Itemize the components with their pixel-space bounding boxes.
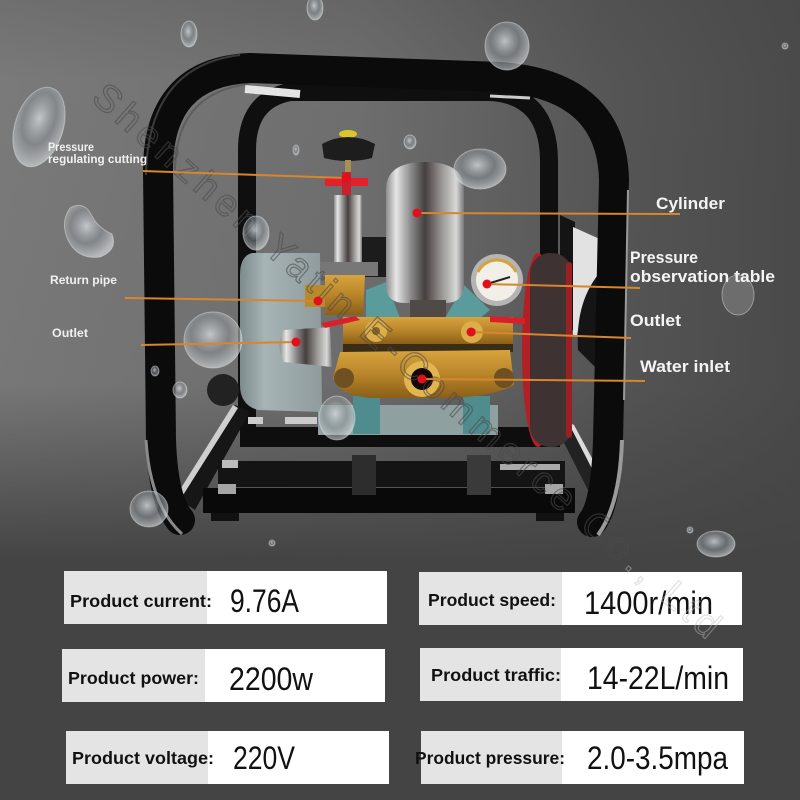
spec: product current: Product current: [70, 591, 212, 611]
callout lines and dots [125, 171, 680, 384]
water droplets [4, 0, 788, 557]
tank [386, 162, 464, 318]
label: pressure observation table [630, 249, 775, 286]
chrome outlet [280, 327, 332, 367]
spec: product power [62, 649, 385, 702]
spec: product traffic: Product traffic: [431, 665, 561, 685]
base frame [176, 405, 612, 521]
spec: product voltage: Product voltage: [72, 748, 214, 768]
label: return pipe: Return pipe [50, 275, 117, 287]
spec: product voltage [66, 731, 389, 784]
spec: product pressure [415, 731, 744, 784]
pump head [321, 316, 525, 398]
label: pressure regulating cutting: regulating cutting [48, 154, 147, 166]
spec: product speed [419, 572, 742, 625]
rear black housing [360, 237, 390, 277]
pressure gauge [471, 254, 523, 306]
outer frame tube [146, 55, 628, 535]
label: outlet right: Outlet [630, 312, 682, 330]
pump legs [353, 396, 380, 434]
motor [240, 253, 322, 412]
label: pressure observation table: Pressure [630, 249, 698, 267]
teal crankcase [366, 282, 400, 318]
spec: product power: 2200w [229, 661, 314, 697]
spec: product voltage: 220V [233, 740, 296, 776]
spec: product traffic: 14-22L/min [587, 660, 729, 696]
power plug [207, 374, 239, 406]
pulley [522, 253, 572, 447]
watermark: Shenzhen Yatin E-Commerce Co., Ltd [84, 75, 729, 647]
spec: product pressure: Product pressure: [415, 748, 565, 768]
label: water inlet: Water inlet [640, 358, 731, 376]
pump assembly [207, 130, 572, 447]
spec: product power: Product power: [68, 668, 199, 688]
spec: product speed: 1400r/min [584, 585, 713, 621]
watermark over specs: Shenzhen Yatin E-Commerce Co., Ltd [84, 75, 729, 647]
spec: product current: 9.76A [230, 583, 300, 619]
right rear panel [560, 215, 602, 372]
spec: product traffic [420, 648, 743, 701]
label: cylinder: Cylinder [656, 195, 726, 213]
spec: product current [64, 571, 387, 624]
spec: product pressure: 2.0-3.5mpa [587, 740, 728, 776]
label: pressure regulating cutting [48, 142, 147, 166]
label: outlet left: Outlet [52, 328, 88, 340]
inner frame tube [247, 92, 549, 430]
spec: product speed: Product speed: [428, 590, 556, 610]
pressure regulator [305, 130, 378, 315]
label: pressure regulating cutting: Pressure [48, 142, 94, 154]
label: pressure observation table: observation table [630, 268, 775, 286]
